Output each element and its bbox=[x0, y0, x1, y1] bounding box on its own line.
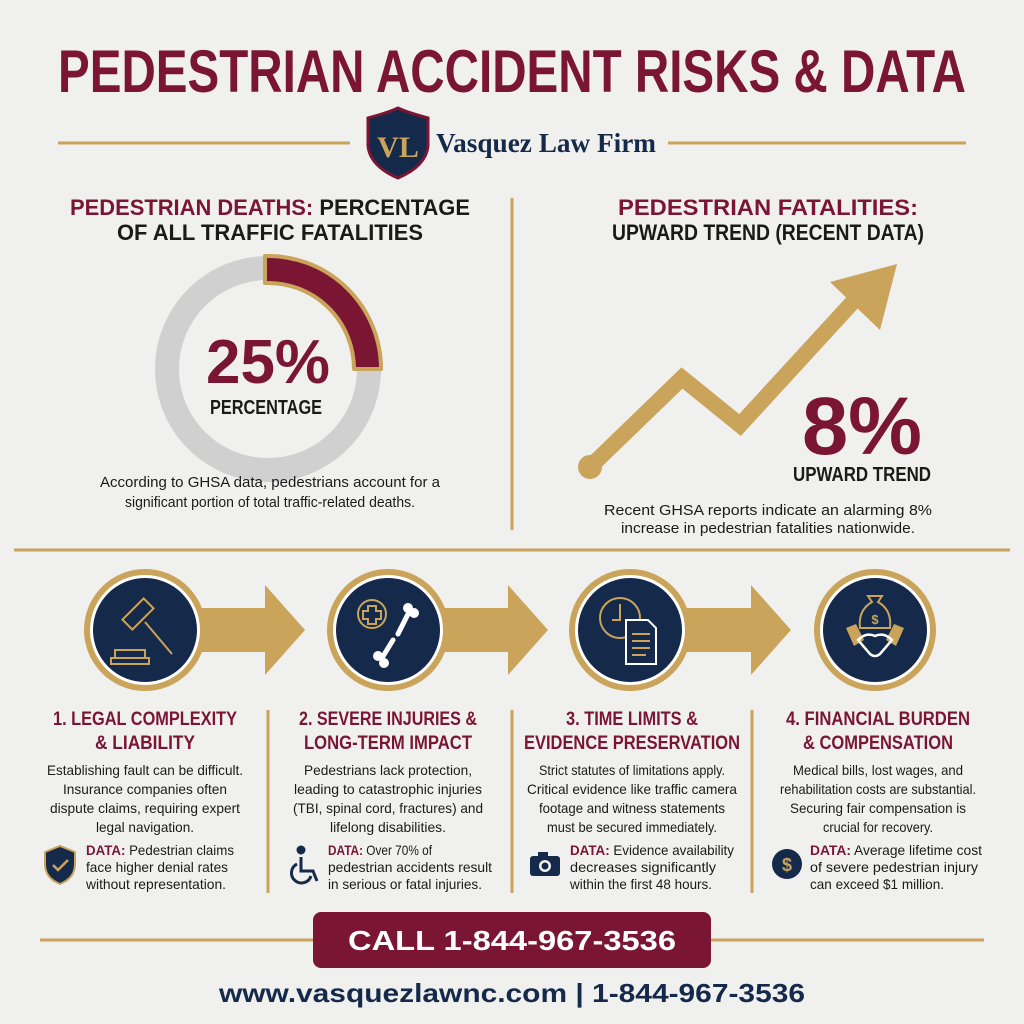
icon: shield check bbox=[45, 846, 75, 884]
caption: trend: Recent GHSA reports indicate an alarming 8% bbox=[604, 502, 932, 519]
donut chart bbox=[167, 256, 381, 470]
step 4: financial burden: DATA: Average lifetime cost bbox=[810, 842, 982, 858]
logo bbox=[368, 108, 657, 178]
step 1: legal complexity: Insurance companies often bbox=[63, 781, 227, 797]
icon: clock and document bbox=[569, 569, 691, 691]
stat: 8%: 8% bbox=[802, 381, 922, 472]
step 2: severe injuries: lifelong disabilities. bbox=[330, 819, 446, 835]
icon: injury bbox=[327, 569, 449, 691]
icon: shield logo: VL bbox=[377, 131, 419, 164]
step 4: financial burden: can exceed $1 million. bbox=[810, 876, 944, 892]
heading: deaths: PEDESTRIAN DEATHS: PERCENTAGE bbox=[70, 195, 470, 220]
step 3: time limits: Critical evidence like traffic camera bbox=[527, 781, 737, 797]
icon: camera bbox=[530, 852, 560, 876]
column dividers bbox=[268, 710, 752, 893]
step 2: severe injuries: pedestrian accidents result bbox=[328, 859, 492, 875]
caption: trend: increase in pedestrian fatalities nationwide. bbox=[621, 520, 915, 537]
caption: deaths: significant portion of total traffic-related deaths. bbox=[125, 494, 415, 511]
step 3: time limits: Strict statutes of limitations apply. bbox=[539, 762, 725, 778]
caption: trend bbox=[604, 502, 932, 537]
caption: deaths: According to GHSA data, pedestrians account for a bbox=[100, 474, 441, 491]
call button: CALL 1-844-967-3536 bbox=[348, 925, 676, 956]
icon: gavel bbox=[84, 569, 206, 691]
step 4: financial burden: crucial for recovery. bbox=[823, 819, 933, 835]
stat: 8%: UPWARD TREND bbox=[793, 464, 931, 486]
step 1: legal complexity: 1. LEGAL COMPLEXITY bbox=[53, 709, 237, 730]
call button bbox=[313, 912, 711, 968]
icon: dollar coin bbox=[772, 849, 802, 879]
step 1: legal complexity bbox=[45, 709, 243, 892]
step 3: time limits: must be secured immediately. bbox=[547, 819, 717, 835]
step 2: severe injuries: DATA: Over 70% of bbox=[328, 842, 432, 858]
step 2: severe injuries: in serious or fatal injuries. bbox=[328, 876, 482, 892]
step 2: severe injuries: 2. SEVERE INJURIES & bbox=[299, 709, 477, 730]
step 1: legal complexity: Establishing fault can be difficult. bbox=[47, 762, 243, 778]
step 2: severe injuries: Pedestrians lack protection, bbox=[304, 762, 472, 778]
heading: trend bbox=[612, 195, 924, 245]
footer website: www.vasquezlawnc.com | 1-844-967-3536 bbox=[218, 978, 805, 1008]
icon: dollar coin: $ bbox=[782, 855, 792, 875]
arrows between steps bbox=[200, 585, 791, 675]
icon: wheelchair bbox=[291, 847, 317, 883]
step 4: financial burden bbox=[772, 709, 982, 892]
step 4: financial burden: 4. FINANCIAL BURDEN bbox=[786, 709, 970, 730]
step 1: legal complexity: without representation. bbox=[85, 876, 226, 892]
step 3: time limits: DATA: Evidence availability bbox=[570, 842, 734, 858]
logo text: Vasquez Law Firm bbox=[436, 128, 657, 158]
step 4: financial burden: Securing fair compensation is bbox=[790, 800, 966, 816]
heading: trend: PEDESTRIAN FATALITIES: bbox=[618, 195, 918, 220]
step 3: time limits: within the first 48 hours. bbox=[569, 876, 712, 892]
step 1: legal complexity: dispute claims, requiring expert bbox=[50, 800, 240, 816]
heading: deaths bbox=[70, 195, 470, 245]
step 1: legal complexity: & LIABILITY bbox=[95, 733, 195, 754]
step 2: severe injuries bbox=[291, 709, 492, 892]
step 2: severe injuries: (TBI, spinal cord, fractures) and bbox=[293, 800, 483, 816]
step 1: legal complexity: legal navigation. bbox=[96, 819, 194, 835]
step 2: severe injuries: leading to catastrophic injuries bbox=[294, 781, 482, 797]
donut chart: PERCENTAGE bbox=[210, 397, 322, 419]
step 4: financial burden: of severe pedestrian injury bbox=[810, 859, 978, 875]
step 1: legal complexity: face higher denial rates bbox=[86, 859, 228, 875]
step 4: financial burden: Medical bills, lost wages, and bbox=[793, 762, 963, 778]
step 4: financial burden: & COMPENSATION bbox=[803, 733, 953, 754]
step 3: time limits: EVIDENCE PRESERVATION bbox=[524, 733, 740, 754]
step 2: severe injuries: LONG-TERM IMPACT bbox=[304, 733, 472, 754]
step 4: financial burden: rehabilitation costs are substantial. bbox=[780, 781, 976, 797]
donut chart: 25% bbox=[206, 328, 330, 397]
heading: deaths: OF ALL TRAFFIC FATALITIES bbox=[117, 220, 423, 245]
chart: trend arrow bbox=[578, 264, 897, 479]
icon: shield logo bbox=[368, 108, 428, 178]
icon: money and handshake bbox=[814, 569, 936, 691]
step 3: time limits bbox=[524, 709, 740, 892]
icon: money and handshake: $ bbox=[871, 612, 879, 627]
panel: upward trend bbox=[578, 195, 932, 537]
step 3: time limits: decreases significantly bbox=[570, 859, 716, 875]
heading: trend: UPWARD TREND (RECENT DATA) bbox=[612, 220, 924, 245]
step 3: time limits: footage and witness statements bbox=[539, 800, 725, 816]
step 3: time limits: 3. TIME LIMITS & bbox=[566, 709, 698, 730]
step 1: legal complexity: DATA: Pedestrian claims bbox=[86, 842, 234, 858]
caption: deaths bbox=[100, 474, 441, 511]
panel: pedestrian deaths bbox=[70, 195, 470, 511]
